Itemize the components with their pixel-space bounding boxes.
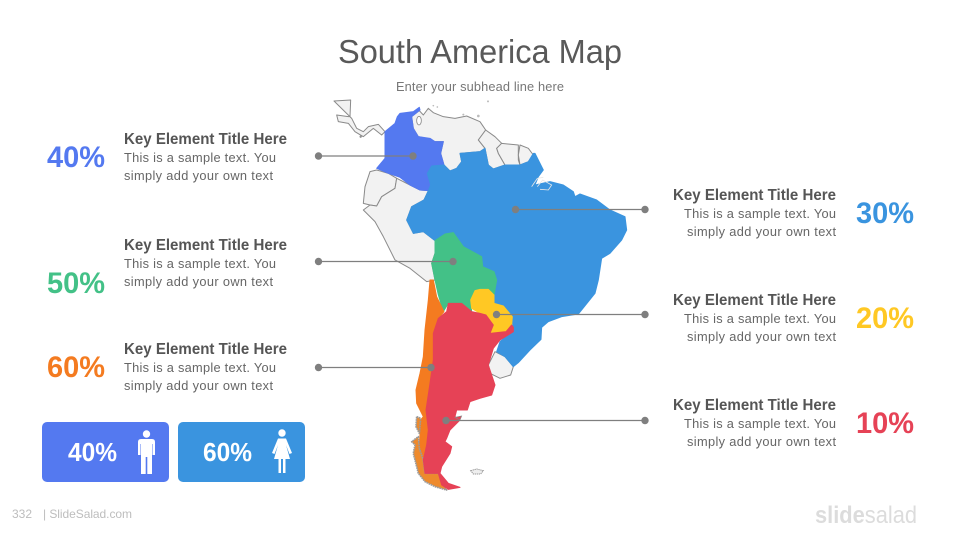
map: Amazon delta channels — [532, 177, 552, 190]
leader line — [512, 206, 649, 213]
panel: female share — [178, 422, 305, 482]
body text: This is a sample text. You — [684, 311, 836, 326]
leader line — [315, 152, 417, 160]
body text: This is a sample text. You — [684, 416, 836, 431]
map: Argentina — [423, 303, 513, 489]
left callout 2 — [47, 237, 457, 300]
map: Uruguay — [488, 352, 513, 378]
footer: page number: 332 — [12, 507, 32, 521]
heading: Key Element Title Here — [124, 237, 287, 254]
map: Ecuador — [363, 170, 397, 206]
heading: Key Element Title Here — [673, 292, 836, 309]
map: Caribbean islets — [432, 100, 489, 117]
panel: male share — [42, 422, 169, 482]
map: Peru — [363, 178, 435, 282]
female percentage: 60% — [203, 437, 252, 467]
map: Brazil — [407, 148, 627, 367]
percentage: 20% — [856, 302, 914, 335]
body text: simply add your own text — [687, 329, 836, 344]
percentage: 40% — [47, 141, 105, 174]
leader line — [315, 364, 435, 371]
map: Peninsula Valdes — [455, 416, 462, 420]
percentage: 50% — [47, 267, 105, 300]
icon: man — [138, 430, 155, 474]
male percentage: 40% — [68, 437, 117, 467]
body text: This is a sample text. You — [684, 206, 836, 221]
right callout 2 — [493, 292, 914, 344]
body text: This is a sample text. You — [124, 256, 276, 271]
heading: Key Element Title Here — [124, 131, 287, 148]
map: Suriname — [497, 143, 520, 165]
leader line — [442, 417, 649, 424]
map of South America — [334, 100, 627, 490]
percentage: 60% — [47, 351, 105, 384]
footer: site name: | SlideSalad.com — [43, 507, 132, 521]
body text: simply add your own text — [687, 224, 836, 239]
map: southern Chile fjords — [412, 417, 447, 490]
body text: simply add your own text — [124, 168, 273, 183]
map: Chile — [412, 280, 447, 490]
body text: This is a sample text. You — [124, 150, 276, 165]
map: Falkland Islands — [471, 469, 483, 474]
map: Guyana — [478, 130, 505, 169]
left callout 3 — [47, 341, 435, 393]
right callout 1 — [512, 187, 914, 239]
logo: slidesalad: slidesalad — [815, 502, 917, 529]
map: Venezuela — [412, 108, 486, 171]
map: Paraguay — [471, 289, 512, 333]
body text: simply add your own text — [124, 378, 273, 393]
leader line — [315, 258, 457, 265]
map: Colombia — [377, 107, 444, 191]
map: Lake Maracaibo — [417, 116, 421, 125]
percentage: 30% — [856, 197, 914, 230]
title: South America Map — [338, 33, 622, 70]
map: French Guiana — [518, 145, 533, 165]
body text: simply add your own text — [124, 274, 273, 289]
right callout 3 — [442, 397, 914, 449]
body text: This is a sample text. You — [124, 360, 276, 375]
map: Bolivia — [432, 233, 497, 312]
percentage: 10% — [856, 407, 914, 440]
icon: woman — [272, 429, 292, 473]
left callout 1 — [47, 131, 417, 183]
map: Central America — [334, 100, 385, 137]
heading: Key Element Title Here — [673, 397, 836, 414]
leader line — [493, 311, 649, 318]
body text: simply add your own text — [687, 434, 836, 449]
heading: Key Element Title Here — [673, 187, 836, 204]
heading: Key Element Title Here — [124, 341, 287, 358]
subhead: Enter your subhead line here — [396, 79, 564, 94]
